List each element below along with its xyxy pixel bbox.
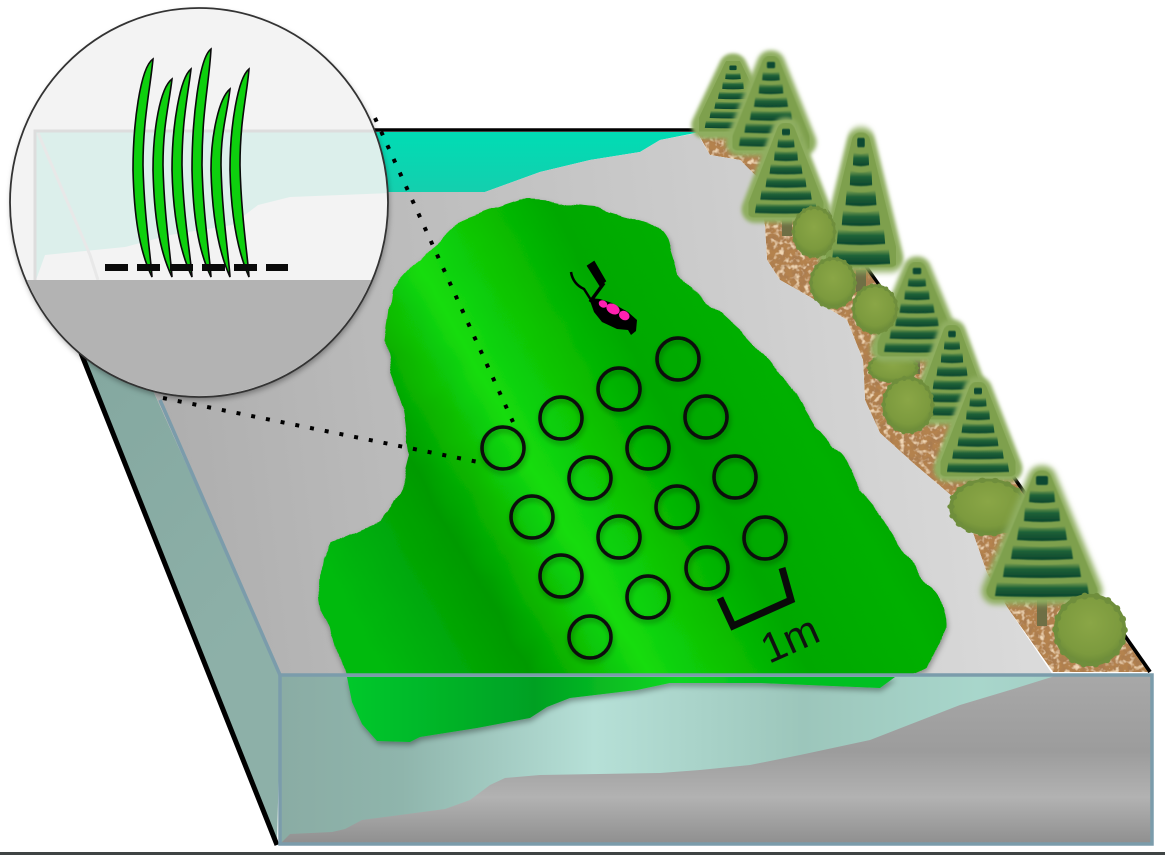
scale bracket	[720, 568, 791, 626]
back water surface	[370, 132, 700, 192]
conifer trees	[705, 62, 1089, 597]
front floor profile	[281, 676, 1152, 845]
scale label: 1m	[754, 606, 826, 672]
inset sediment	[27, 280, 371, 396]
survey circles	[482, 338, 786, 658]
submerged meadow edge	[347, 677, 895, 742]
front water face	[281, 676, 1152, 845]
tree trunks	[782, 216, 1047, 626]
lake floor	[36, 130, 1053, 675]
ground line	[0, 852, 1165, 855]
tank black back edges	[36, 130, 1150, 845]
inset water band	[36, 131, 390, 280]
inset seagrass blades	[133, 49, 249, 277]
inset transect dashes	[105, 264, 288, 271]
seagrass meadow patch	[319, 200, 946, 690]
tank front frame	[160, 400, 1152, 844]
tank side wall	[36, 130, 281, 845]
shrubs	[793, 208, 1124, 664]
icon: scuba diver	[571, 262, 637, 335]
magnified inset lens	[0, 8, 400, 410]
dotted zoom lines	[163, 118, 513, 463]
shoreline soil	[697, 132, 1148, 672]
